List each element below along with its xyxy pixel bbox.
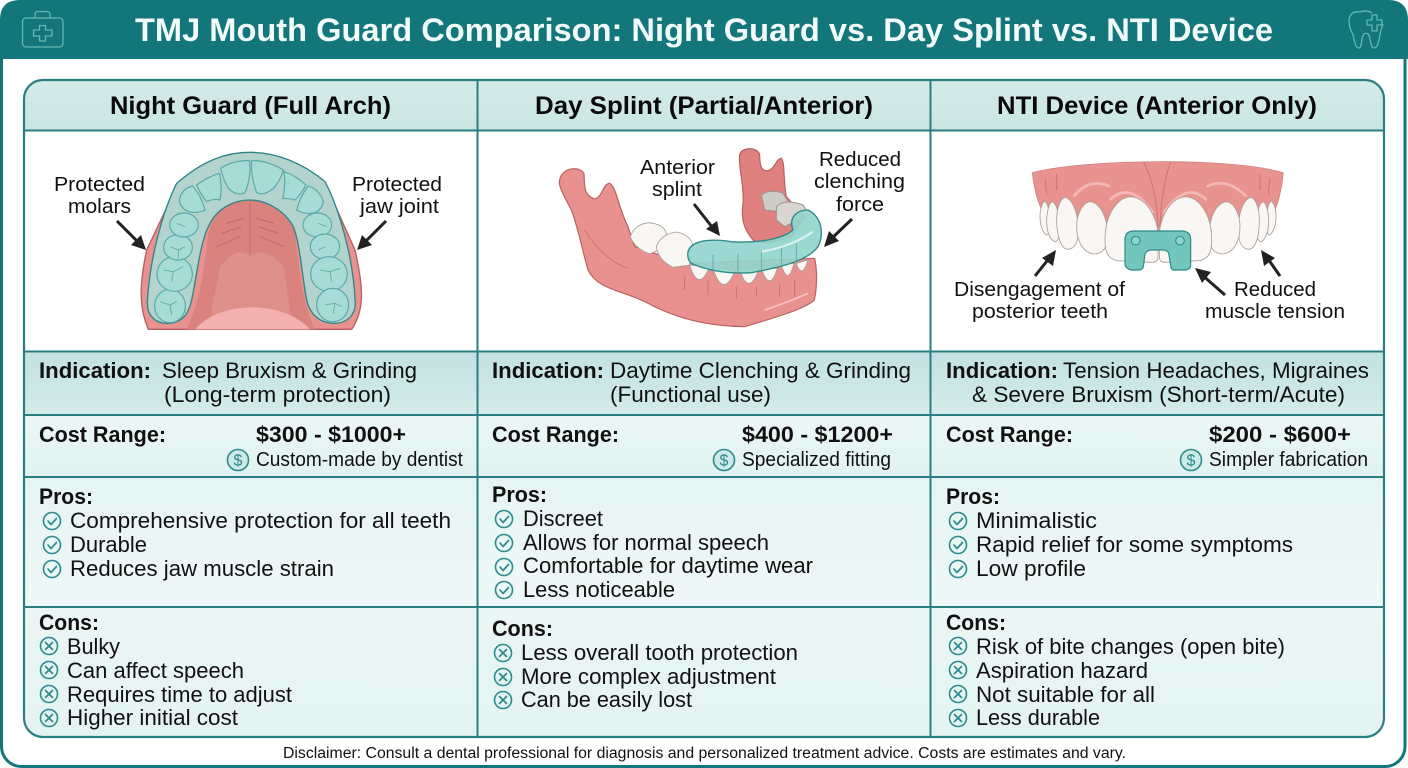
pros list: Comprehensive protection for all teeth bbox=[70, 508, 451, 533]
pros list bbox=[39, 484, 451, 581]
pros list: Discreet bbox=[523, 506, 603, 531]
pros list: Allows for normal speech bbox=[523, 530, 769, 555]
cons list bbox=[946, 610, 1285, 730]
heading: day splint: Day Splint (Partial/Anterior) bbox=[535, 92, 873, 120]
pros list: Less noticeable bbox=[523, 577, 675, 602]
label: anterior splint: Anterior bbox=[640, 156, 715, 179]
label: disengagement of posterior teeth: Disengagement of bbox=[954, 278, 1125, 301]
indication: Sleep Bruxism & Grinding bbox=[162, 358, 417, 383]
label: disengagement of posterior teeth: posterior teeth bbox=[972, 300, 1108, 323]
cost range bbox=[39, 422, 463, 471]
cons list: Less durable bbox=[976, 705, 1100, 730]
icon: tooth with plus bbox=[1349, 11, 1383, 48]
cons list: Requires time to adjust bbox=[67, 682, 292, 707]
label: protected molars: Protected bbox=[54, 173, 145, 196]
illustration: upper teeth with NTI device bbox=[1032, 162, 1283, 270]
disclaimer: Disclaimer: Consult a dental professional for diagnosis and personalized treatment advice. Costs are estimates and vary. bbox=[283, 745, 1126, 762]
cons list bbox=[492, 616, 798, 712]
panel: NTI device column bbox=[946, 92, 1369, 730]
pros list: Reduces jaw muscle strain bbox=[70, 556, 334, 581]
cost range: $300 - $1000+ bbox=[256, 422, 406, 447]
label: reduced muscle tension: Reduced bbox=[1234, 278, 1316, 301]
arrow: to molars bbox=[117, 221, 146, 250]
pros list: Durable bbox=[70, 532, 147, 557]
icon: medical kit bbox=[22, 12, 63, 47]
label: anterior splint: splint bbox=[652, 178, 702, 201]
cost range: $ bbox=[1187, 452, 1196, 470]
cons list: Less overall tooth protection bbox=[521, 640, 798, 665]
label: reduced clenching force bbox=[814, 148, 905, 216]
cost range: Cost Range: bbox=[39, 422, 166, 447]
cost range: Cost Range: bbox=[946, 422, 1073, 447]
label: disengagement of posterior teeth bbox=[954, 278, 1125, 323]
cost range bbox=[946, 422, 1368, 471]
indication bbox=[492, 358, 911, 407]
indication: Indication: bbox=[946, 358, 1058, 383]
cons list: Aspiration hazard bbox=[976, 658, 1148, 683]
arrow: to posterior teeth bbox=[1035, 250, 1056, 276]
title: TMJ Mouth Guard Comparison: Night Guard vs. Day Splint vs. NTI Device bbox=[135, 12, 1273, 48]
cons list: Bulky bbox=[67, 634, 120, 659]
illustration: full arch night guard bbox=[141, 152, 361, 329]
label: reduced muscle tension bbox=[1205, 278, 1345, 323]
cons list: Higher initial cost bbox=[67, 705, 238, 730]
cost range: $200 - $600+ bbox=[1209, 422, 1351, 447]
pros list: Low profile bbox=[976, 556, 1086, 581]
indication: Daytime Clenching & Grinding bbox=[610, 358, 911, 383]
cons list: Can be easily lost bbox=[521, 687, 692, 712]
title banner bbox=[0, 0, 1408, 59]
label: protected molars: molars bbox=[68, 195, 131, 218]
cost range: $ bbox=[720, 452, 729, 470]
heading: night guard: Night Guard (Full Arch) bbox=[110, 92, 391, 120]
arrow: to splint bbox=[694, 204, 720, 236]
arrow: to device bbox=[1195, 268, 1225, 295]
pros list: Pros: bbox=[946, 484, 1000, 509]
indication: Tension Headaches, Migraines bbox=[1063, 358, 1369, 383]
pros list bbox=[492, 482, 813, 602]
cons list: Risk of bite changes (open bite) bbox=[976, 634, 1285, 659]
label: reduced clenching force: Reduced bbox=[819, 148, 901, 171]
indication bbox=[39, 358, 417, 407]
cons list: Cons: bbox=[492, 616, 553, 641]
label: protected jaw joint bbox=[352, 173, 442, 218]
cost range: Cost Range: bbox=[492, 422, 619, 447]
arrow: to clenching force bbox=[824, 219, 852, 247]
cost range: Simpler fabrication bbox=[1209, 449, 1368, 471]
illustration: lower jaw with anterior splint bbox=[559, 149, 821, 327]
pros list bbox=[946, 484, 1293, 581]
cons list: Cons: bbox=[946, 610, 1006, 635]
pros list: Pros: bbox=[39, 484, 93, 509]
label: anterior splint bbox=[640, 156, 715, 201]
indication bbox=[946, 358, 1369, 407]
indication: (Functional use) bbox=[610, 382, 771, 407]
cons list: Cons: bbox=[39, 610, 99, 635]
label: reduced muscle tension: muscle tension bbox=[1205, 300, 1345, 323]
panel: day splint column bbox=[492, 92, 911, 712]
arrow: to muscle tension bbox=[1261, 250, 1280, 276]
label: protected molars bbox=[54, 173, 145, 218]
panel: night guard column bbox=[39, 92, 463, 730]
arrow: to jaw joint bbox=[357, 221, 386, 250]
cons list: Can affect speech bbox=[67, 658, 244, 683]
indication: Indication: bbox=[39, 358, 151, 383]
cost range: $ bbox=[234, 452, 243, 470]
cost range bbox=[492, 422, 893, 471]
cons list: More complex adjustment bbox=[521, 664, 776, 689]
pros list: Minimalistic bbox=[976, 508, 1097, 533]
indication: Indication: bbox=[492, 358, 604, 383]
pros list: Comfortable for daytime wear bbox=[523, 553, 813, 578]
label: protected jaw joint: jaw joint bbox=[359, 195, 439, 218]
indication: (Long-term protection) bbox=[164, 382, 391, 407]
cost range: Specialized fitting bbox=[742, 449, 891, 471]
cost range: Custom-made by dentist bbox=[256, 449, 463, 471]
cost range: $400 - $1200+ bbox=[742, 422, 893, 447]
pros list: Pros: bbox=[492, 482, 547, 507]
label: reduced clenching force: clenching bbox=[814, 170, 905, 193]
heading: NTI device: NTI Device (Anterior Only) bbox=[997, 92, 1317, 120]
label: protected jaw joint: Protected bbox=[352, 173, 442, 196]
cons list bbox=[39, 610, 292, 730]
label: reduced clenching force: force bbox=[836, 193, 884, 216]
cons list: Not suitable for all bbox=[976, 682, 1155, 707]
indication: & Severe Bruxism (Short-term/Acute) bbox=[972, 382, 1345, 407]
pros list: Rapid relief for some symptoms bbox=[976, 532, 1293, 557]
